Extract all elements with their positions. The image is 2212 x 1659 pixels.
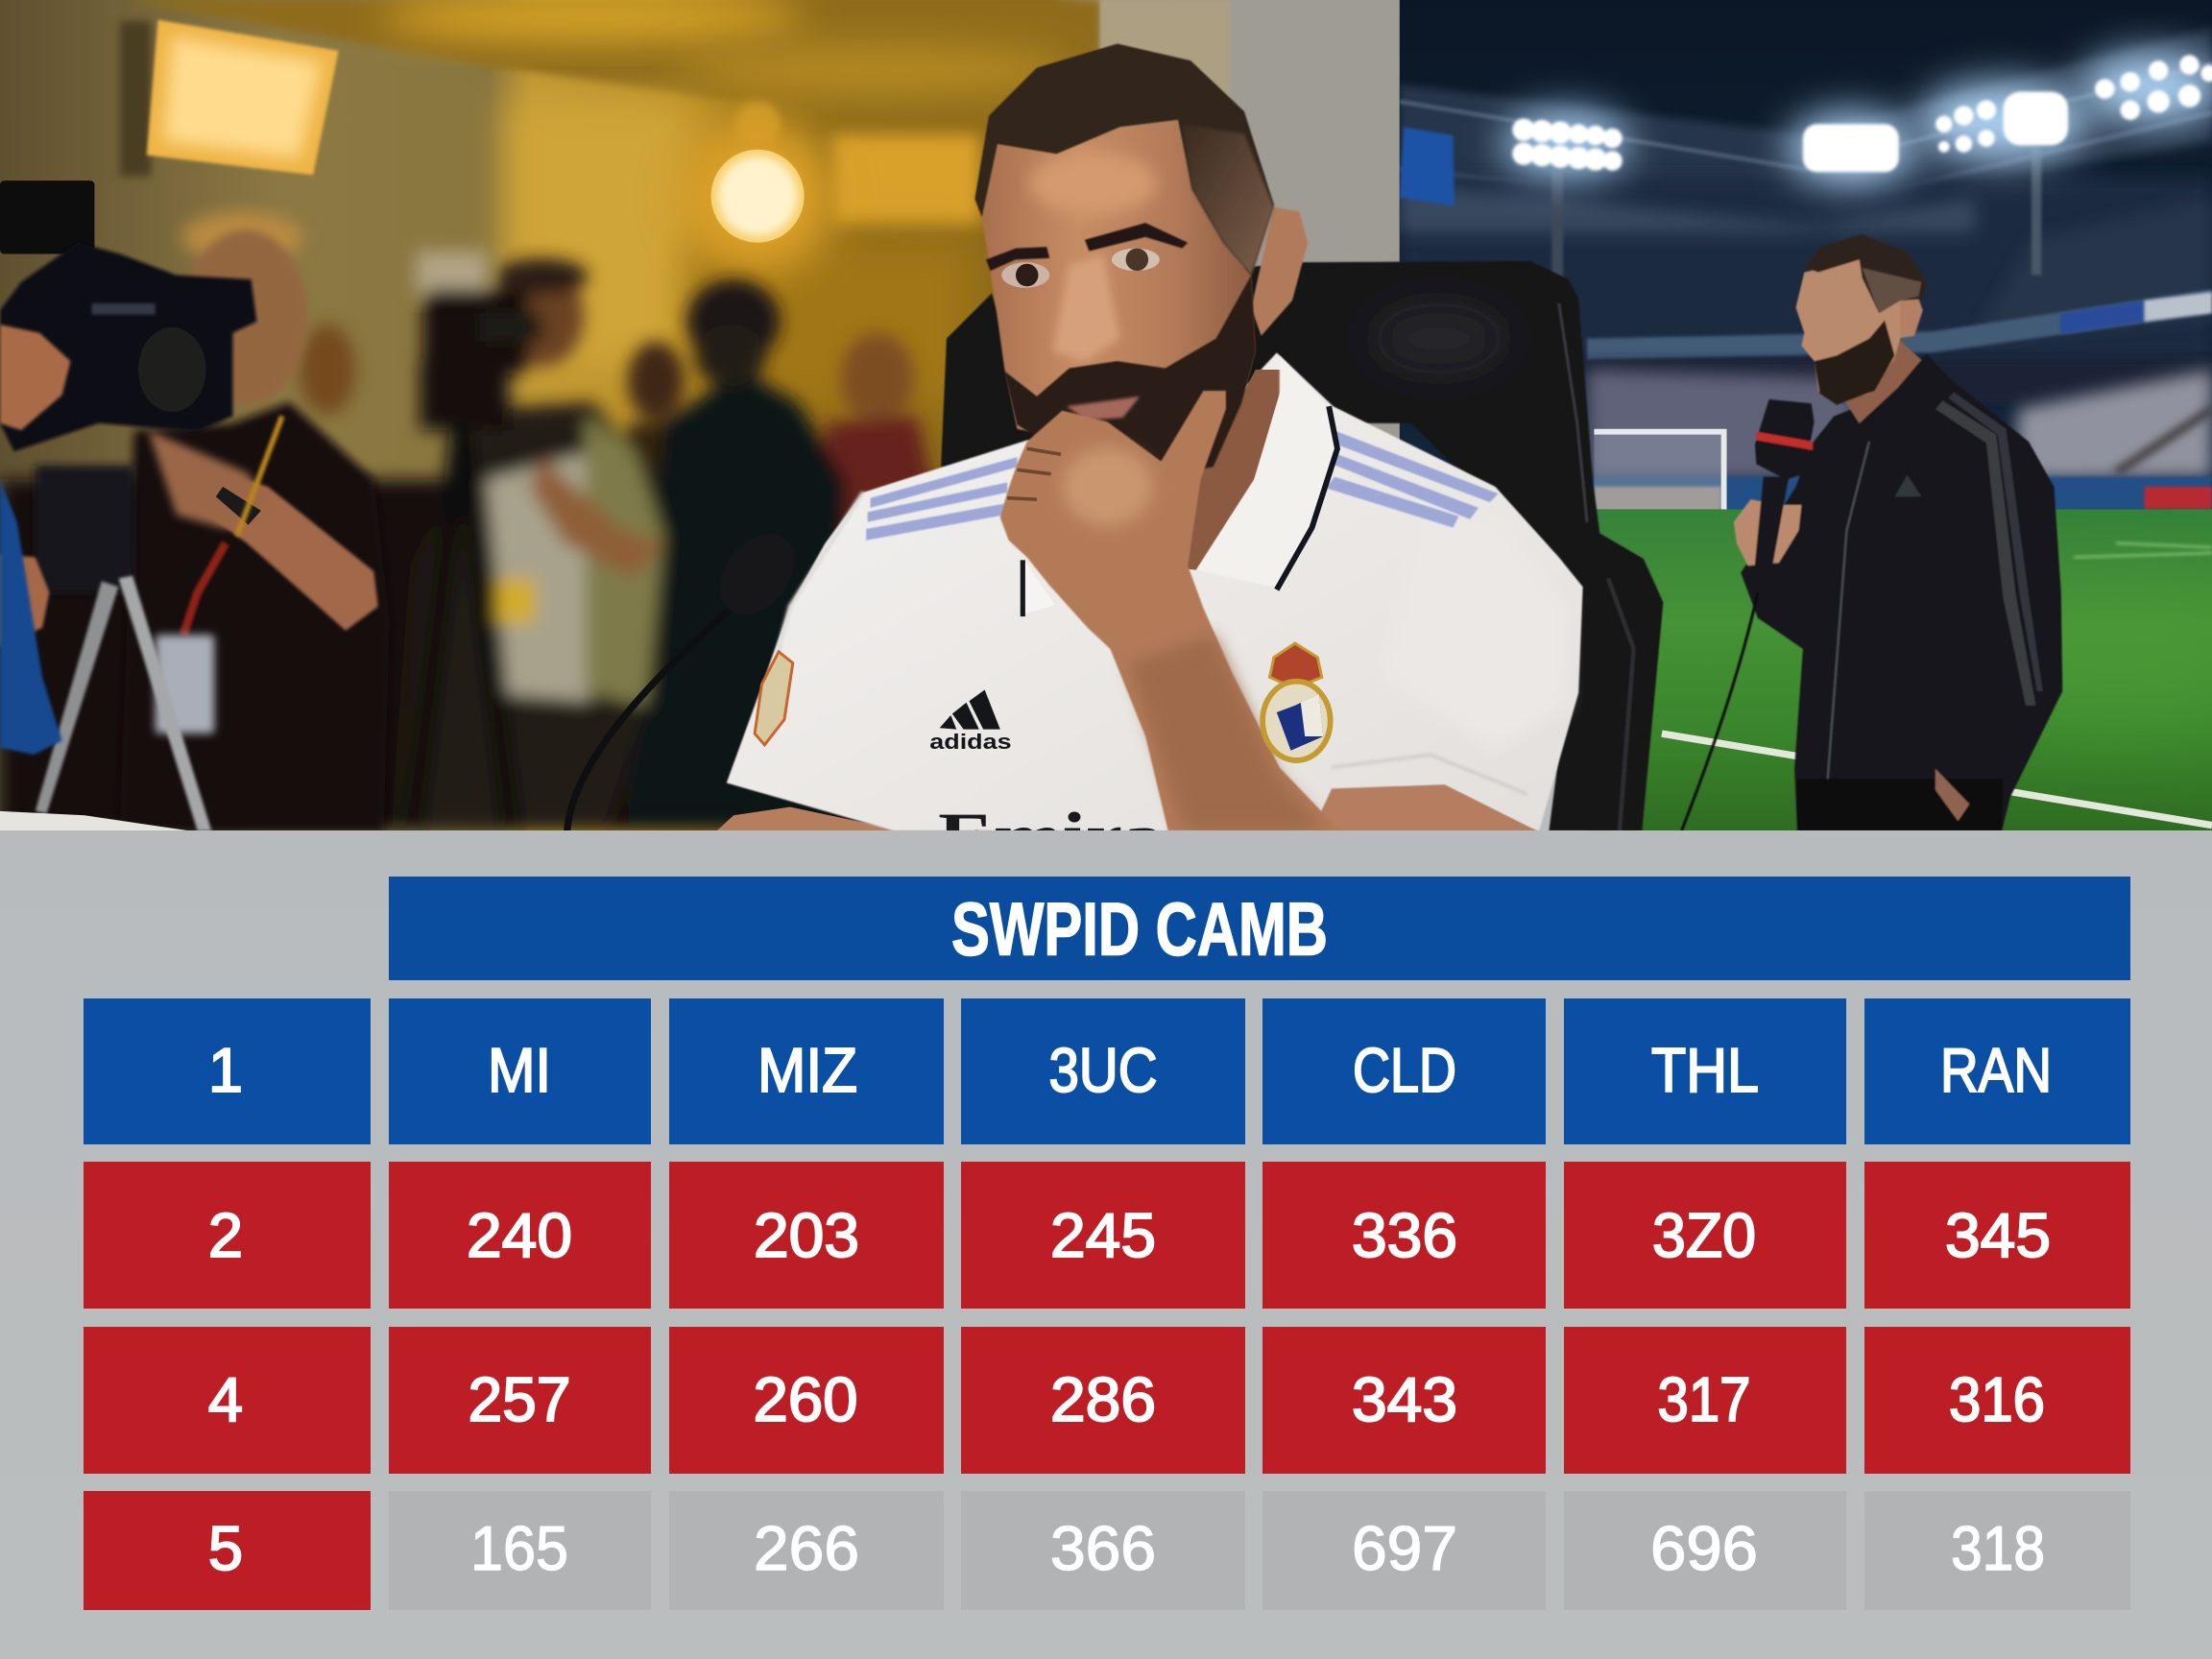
hair bbox=[974, 44, 1274, 276]
pitch line bbox=[1662, 733, 2212, 826]
table row 5: 266 bbox=[754, 1513, 859, 1583]
table row 4: 317 bbox=[1657, 1364, 1751, 1434]
table row 5 bbox=[84, 1491, 2130, 1610]
icon: three stripes logo bbox=[929, 690, 1012, 754]
table row 5: 165 bbox=[470, 1513, 568, 1583]
panel: table microphone bbox=[567, 519, 809, 830]
panel: data table background bbox=[0, 830, 2212, 1659]
icon: floodlights bbox=[1503, 52, 2212, 184]
brows bbox=[986, 247, 1049, 271]
table row 2: 245 bbox=[1050, 1200, 1156, 1270]
icon: three stripes logo: adidas bbox=[929, 730, 1012, 754]
neck bbox=[1841, 339, 1921, 423]
table header row bbox=[84, 998, 2130, 1144]
beard bbox=[1815, 321, 1894, 405]
hair bbox=[1804, 234, 1927, 313]
sponsor text: Emira bbox=[938, 798, 1164, 876]
table header row: CLD bbox=[1353, 1035, 1456, 1105]
panel: man at pitchside with microphone bbox=[1682, 234, 2062, 830]
shirt stripes bbox=[866, 432, 1498, 541]
table row 2: 240 bbox=[467, 1200, 572, 1270]
forearm and hand bbox=[1000, 391, 1340, 830]
table row 5: 696 bbox=[1650, 1513, 1758, 1583]
nose bbox=[1052, 253, 1120, 361]
icon: sleeve badge bbox=[755, 652, 793, 745]
table row 2: 345 bbox=[1945, 1200, 2051, 1270]
table row 2 bbox=[84, 1162, 2130, 1309]
microphone bbox=[1752, 399, 1815, 592]
title bar: SWPID CAMB bbox=[951, 887, 1328, 972]
panel: press room background bbox=[0, 0, 1400, 830]
placket collar bbox=[1024, 560, 1055, 613]
icon: TV camera on tripod bbox=[0, 180, 256, 830]
icon: blue stadium screen bbox=[1400, 127, 1455, 206]
table row 5: 5 bbox=[208, 1513, 243, 1583]
table row 2: 3Z0 bbox=[1652, 1200, 1756, 1270]
table header row: 3UC bbox=[1048, 1035, 1158, 1105]
mic cable bbox=[1682, 592, 1758, 830]
table row 4: 316 bbox=[1949, 1364, 2045, 1434]
table row 4: 260 bbox=[753, 1364, 858, 1434]
forehead highlight bbox=[1030, 153, 1157, 214]
table row 5: 697 bbox=[1352, 1513, 1457, 1583]
hand bbox=[1734, 499, 1801, 565]
bare arms below sleeves bbox=[716, 806, 902, 830]
beard bbox=[1004, 276, 1256, 480]
icon: studio light panel bbox=[120, 20, 339, 177]
table row 4: 286 bbox=[1050, 1364, 1156, 1434]
right eye bbox=[1112, 249, 1160, 271]
table row 4: 4 bbox=[208, 1364, 243, 1434]
table row 2: 2 bbox=[208, 1200, 243, 1270]
trousers bbox=[1797, 779, 2004, 830]
finger creases bbox=[1007, 448, 1061, 499]
ear bbox=[1897, 295, 1923, 339]
hair fade bbox=[1182, 124, 1274, 276]
icon: club crest bbox=[1262, 643, 1331, 760]
table header row: MIZ bbox=[757, 1035, 857, 1105]
table row 4 bbox=[84, 1327, 2130, 1474]
table header row: RAN bbox=[1940, 1035, 2052, 1105]
table header row: THL bbox=[1651, 1035, 1759, 1105]
panel: photo collage bbox=[0, 0, 2212, 876]
jacket bbox=[1741, 354, 2062, 830]
knuckle highlights bbox=[1062, 447, 1152, 526]
neck bbox=[1129, 370, 1286, 570]
head bbox=[1796, 259, 1900, 403]
ear bbox=[1251, 207, 1308, 336]
panel: cameraman bbox=[120, 211, 390, 830]
table row 4: 343 bbox=[1352, 1364, 1457, 1434]
panel: blurred press crowd bbox=[0, 252, 988, 830]
panel: central man in white shirt bbox=[716, 44, 1583, 876]
face bbox=[982, 120, 1256, 467]
left eye bbox=[1001, 262, 1049, 288]
table row 4: 257 bbox=[469, 1364, 570, 1434]
big collar bbox=[1196, 355, 1337, 589]
table header row: 1 bbox=[208, 1035, 243, 1105]
icon: goal frame bbox=[1594, 432, 1724, 509]
title bar bbox=[389, 877, 2130, 980]
arm shading bbox=[1129, 635, 1326, 830]
table row 5: 318 bbox=[1951, 1513, 2045, 1583]
shirt bbox=[727, 352, 1583, 830]
table row 5: 366 bbox=[1050, 1513, 1156, 1583]
icon: round wall lamp bbox=[680, 118, 835, 274]
table row 2: 203 bbox=[754, 1200, 859, 1270]
panel: stadium background bbox=[1400, 0, 2212, 830]
table header row: MI bbox=[488, 1035, 551, 1105]
panel: office chair bbox=[941, 261, 1663, 830]
panel: white table edge bbox=[0, 811, 190, 830]
lips bbox=[1067, 397, 1140, 421]
table row 2: 336 bbox=[1352, 1200, 1457, 1270]
panel: green pitch bbox=[1587, 509, 2212, 830]
